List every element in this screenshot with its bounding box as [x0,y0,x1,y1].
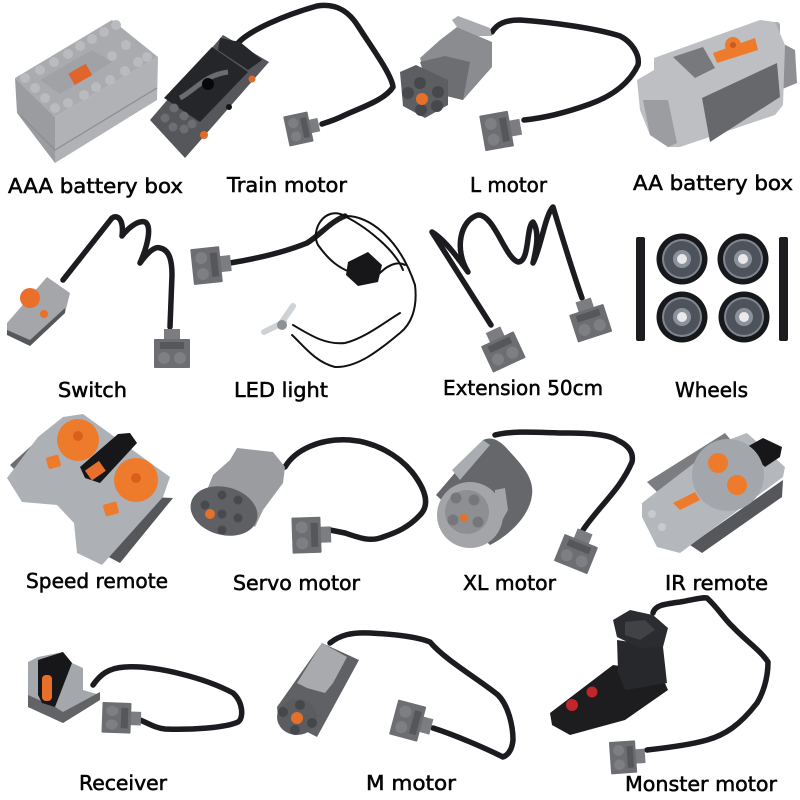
product: Speed remote [7,414,173,565]
product: Monster motor [550,598,768,774]
product: IR remote [642,433,785,553]
product: Wheels [636,234,788,342]
product: XL motor [436,432,632,574]
label: L motor: L motor [470,173,548,197]
product: Train motor [150,5,393,158]
label: Receiver: Receiver [79,771,168,795]
label: M motor: M motor [366,771,457,795]
label: AAA battery box: AAA battery box [8,174,183,198]
product: LED light [190,213,416,367]
label: Train motor: Train motor [226,173,348,197]
label: AA battery box: AA battery box [633,171,793,195]
label: XL motor: XL motor [463,571,557,595]
product: Switch [7,217,190,368]
label: Wheels: Wheels [675,378,748,402]
product: L motor [400,16,638,151]
label: LED light: LED light [234,378,328,402]
product: M motor [277,633,513,757]
product: AAA battery box [15,20,158,163]
label: Servo motor: Servo motor [233,571,361,595]
label: Switch: Switch [58,378,127,402]
label: IR remote: IR remote [665,571,768,595]
label: Monster motor: Monster motor [625,772,778,796]
product: AA battery box [637,20,797,147]
label: Extension 50cm: Extension 50cm [443,376,603,400]
label: Speed remote: Speed remote [26,569,168,593]
product: Servo motor [185,440,426,554]
product: Receiver [28,652,242,734]
product: Extension 50cm [432,207,612,373]
